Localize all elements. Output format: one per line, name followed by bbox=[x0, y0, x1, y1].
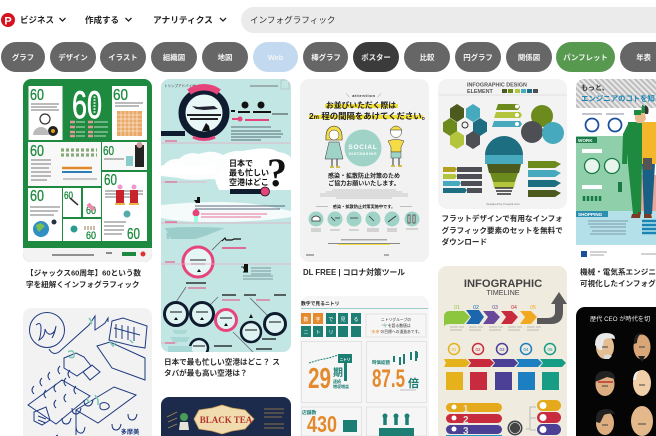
pin: Nitori in numbers: "今"を語る数値は bbox=[381, 323, 411, 328]
pin: infographic timeline: TIMELINE bbox=[486, 288, 520, 297]
icon: pinterest logo bbox=[1, 13, 15, 28]
artwork: SHOPPING bbox=[578, 212, 603, 217]
icon: pinterest logo: P bbox=[4, 16, 12, 28]
poster artwork: 日本で bbox=[229, 158, 253, 168]
pin: Nitori in numbers: る bbox=[353, 317, 359, 323]
pin: Nitori in numbers: 字 bbox=[315, 317, 321, 323]
chip: illustration: イラスト bbox=[108, 53, 138, 62]
pin: infographic timeline: INFOGRAPHIC bbox=[464, 278, 542, 290]
pin: infographic timeline: 2 bbox=[463, 415, 469, 426]
chip: timeline: 年表 bbox=[636, 53, 652, 62]
menu: business: ビジネス bbox=[20, 15, 54, 25]
pin: social distancing poster bbox=[300, 79, 430, 277]
artwork bbox=[576, 79, 656, 261]
chip: bar graph bbox=[303, 42, 348, 72]
pin: infographic timeline: 01 bbox=[454, 305, 460, 311]
pin: CEO portraits: 歴代 CEO が時代を切 bbox=[590, 315, 650, 323]
poster artwork: 60 bbox=[86, 230, 96, 242]
pin: infographic design element bbox=[438, 79, 567, 223]
caption line 2: タバが最も高い空港は？ bbox=[164, 368, 248, 378]
poster artwork: 2m 程の間隔をあけてください。 bbox=[309, 111, 430, 121]
pin: black tea poster bbox=[161, 397, 291, 436]
pin: Nitori in numbers: 見 bbox=[340, 317, 346, 323]
pin: Nitori in numbers: 87.5 bbox=[372, 365, 405, 393]
pin: line art office: 多摩美 bbox=[121, 428, 140, 436]
artwork: INFOGRAPHIC DESIGN bbox=[467, 82, 527, 88]
pin: infographic timeline bbox=[438, 266, 567, 436]
pin: JAKKS 60 years poster bbox=[23, 79, 152, 278]
pin: Nitori in numbers: 数 bbox=[303, 316, 309, 323]
poster artwork: 感染・拡散防止対策のため bbox=[328, 172, 400, 180]
poster artwork bbox=[161, 79, 291, 357]
pin: Nitori in numbers: 時価総額 bbox=[372, 359, 390, 366]
pin: Nitori in numbers: で bbox=[328, 317, 334, 323]
chip: comparison bbox=[404, 42, 450, 72]
poster artwork bbox=[23, 79, 152, 262]
pin: Nitori in numbers: 数字で見るニトリ bbox=[301, 300, 339, 307]
chip: pamphlet bbox=[556, 42, 615, 72]
caption: 日本で最も忙しい空港はどこ？ ス bbox=[164, 356, 280, 366]
poster artwork: ＼ attention ／ bbox=[346, 93, 382, 98]
search bar: インフォグラフィック bbox=[250, 14, 336, 25]
pin: Nitori in numbers: リ bbox=[328, 330, 334, 336]
pin: infographic timeline: 03 bbox=[492, 305, 498, 311]
poster artwork: 60 bbox=[30, 143, 44, 160]
menu: analytics: アナリティクス bbox=[153, 15, 213, 25]
chip: poster bbox=[353, 42, 399, 72]
artwork: designed by Freepik.com bbox=[486, 202, 520, 206]
chip: comparison: 比較 bbox=[420, 53, 435, 62]
poster artwork: 60 bbox=[30, 87, 44, 104]
pin: infographic timeline: 04 bbox=[511, 305, 517, 311]
caption line 2: 可視化したインフォグ bbox=[580, 278, 656, 288]
chip: pie chart: 円グラフ bbox=[463, 53, 493, 62]
pin: infographic timeline: 04 bbox=[523, 347, 529, 352]
chip: illustration bbox=[100, 42, 146, 72]
pin: infographic timeline: 02 bbox=[475, 347, 481, 352]
chip: web: Web bbox=[268, 53, 284, 62]
chip: timeline bbox=[620, 42, 656, 72]
pin: infographic timeline: 02 bbox=[473, 305, 479, 311]
poster artwork: 60 bbox=[72, 84, 102, 127]
artwork: もっと、 bbox=[581, 84, 609, 92]
poster artwork: 感染・拡散防止対策実施中です。 bbox=[333, 203, 395, 210]
caption line 3: ダウンロード bbox=[442, 236, 487, 246]
pin: infographic timeline: 01 bbox=[451, 347, 457, 352]
poster artwork: 60 bbox=[127, 226, 140, 243]
poster artwork: 60 bbox=[113, 87, 128, 104]
chip: relationship diagram: 関係図 bbox=[518, 53, 540, 62]
poster artwork bbox=[300, 79, 430, 262]
pin: Nitori in numbers: 連続 bbox=[333, 378, 341, 384]
caption: フラットデザインで有用なインフォ bbox=[442, 213, 563, 223]
pin: Nitori in numbers bbox=[300, 296, 429, 436]
pin: infographic timeline: 1 bbox=[463, 404, 469, 415]
search bar bbox=[241, 7, 656, 33]
poster artwork: SOCIAL bbox=[348, 144, 378, 151]
pin: engineer infographic bbox=[576, 79, 656, 276]
pin: Nitori in numbers: 倍 bbox=[408, 376, 419, 390]
chip: map bbox=[202, 42, 248, 72]
navigation bar bbox=[1, 7, 656, 33]
pin: Nitori in numbers: 増収増益 bbox=[333, 383, 349, 389]
pin: Nitori in numbers: 店舗数 bbox=[302, 409, 317, 416]
chip: pie chart bbox=[455, 42, 501, 72]
poster artwork: 60 bbox=[30, 188, 44, 205]
pin: infographic timeline: 05 bbox=[547, 347, 553, 352]
pin: busiest airport poster bbox=[161, 79, 291, 366]
pin: CEO portraits bbox=[576, 307, 656, 436]
pin: Nitori in numbers: ニトリ bbox=[340, 358, 350, 362]
pin: infographic timeline: 05 bbox=[530, 305, 536, 311]
artwork: WORK bbox=[578, 138, 593, 143]
pin: black tea poster: BLACK TEA bbox=[200, 415, 253, 425]
artwork: エンジニアのコトを知 bbox=[581, 94, 655, 103]
pin: Nitori in numbers: 29 bbox=[308, 363, 331, 395]
chip: map: 地図 bbox=[218, 53, 232, 62]
pin: infographic timeline: 03 bbox=[499, 347, 505, 352]
poster artwork: 空港はどこ bbox=[229, 177, 269, 187]
filter chips bbox=[1, 42, 656, 72]
chip: org chart: 組織図 bbox=[163, 53, 185, 62]
chip: poster: ポスター bbox=[361, 53, 391, 62]
pin: Nitori in numbers: "未来"の目標への道造あです。 bbox=[370, 329, 422, 334]
artwork: ELEMENT bbox=[467, 89, 493, 95]
chip: web bbox=[253, 42, 298, 72]
pin: line art office bbox=[23, 308, 152, 436]
poster artwork: 最も忙しい bbox=[229, 168, 269, 178]
caption: DL FREE | コロナ対策ツール bbox=[303, 267, 405, 277]
caption: 機械・電気系エンジニ bbox=[580, 266, 656, 276]
poster artwork: 60 bbox=[64, 190, 73, 202]
poster artwork: トリップアドバイザー bbox=[164, 83, 199, 88]
poster artwork: ? bbox=[267, 150, 287, 195]
chip: design bbox=[50, 42, 96, 72]
caption line 2: 字を紐解くインフォグラフィック bbox=[26, 279, 140, 289]
pin: Nitori in numbers: 期 bbox=[333, 366, 343, 379]
poster artwork: 60 bbox=[104, 172, 117, 189]
chip: org chart bbox=[151, 42, 197, 72]
menu: create: 作成する bbox=[85, 15, 119, 25]
chip: graph: グラフ bbox=[12, 53, 34, 62]
caption: 【ジャックス60周年】60という数 bbox=[26, 268, 141, 278]
chip: bar graph: 棒グラフ bbox=[311, 53, 341, 62]
chip: relationship diagram bbox=[506, 42, 552, 72]
poster artwork: DISTANSING bbox=[349, 152, 377, 156]
caption line 2: グラフィック要素のセットを無料で bbox=[442, 225, 563, 235]
pin: Nitori in numbers: ニ bbox=[303, 330, 309, 336]
chip: graph bbox=[1, 42, 45, 72]
chip: design: デザイン bbox=[58, 53, 88, 62]
poster artwork: ご協力お願いいたします。 bbox=[328, 180, 400, 188]
pin: Nitori in numbers: ト bbox=[315, 330, 321, 336]
poster artwork: お並びいただく際は bbox=[326, 100, 396, 110]
artwork bbox=[438, 79, 567, 209]
pin: Nitori in numbers: ニトリグループの bbox=[381, 317, 411, 322]
chip: pamphlet: パンフレット bbox=[563, 53, 608, 62]
poster artwork: 60 bbox=[103, 143, 114, 158]
poster artwork: 60 bbox=[86, 205, 96, 217]
